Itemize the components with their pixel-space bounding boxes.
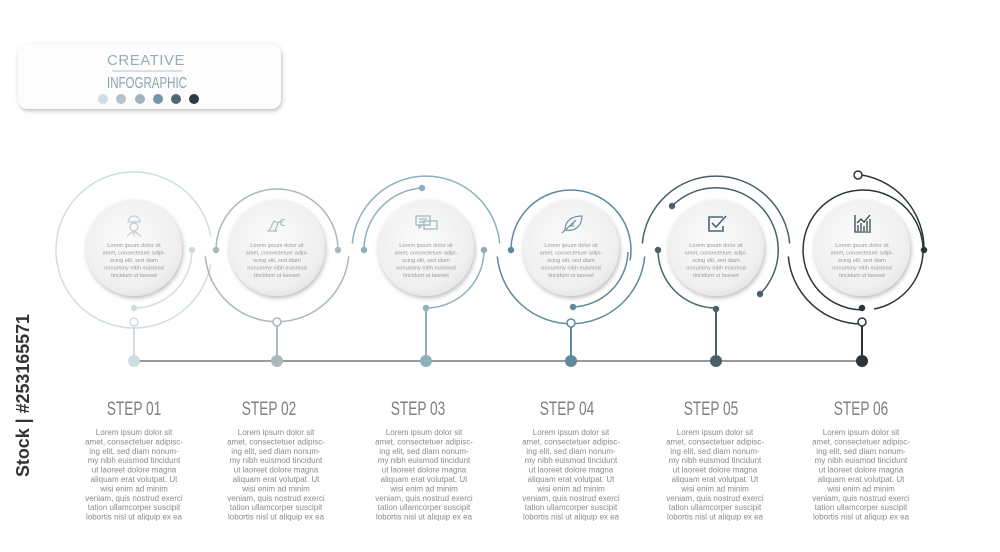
- step 5 description: [666, 428, 764, 522]
- circle 5: amet, consectetuer adipi-: [685, 250, 748, 256]
- icon: bar chart: [855, 215, 871, 232]
- circle 1: Lorem ipsum dolor sit: [107, 243, 161, 249]
- step 5 description: aliquam erat volutpat. Ut: [672, 475, 759, 484]
- step 2 rings: [205, 189, 349, 361]
- step 5 description: lobortis nisl ut aliquip ex ea: [667, 513, 764, 522]
- step 2 description: wisi enim ad minim: [241, 484, 310, 493]
- step 1 description: aliquam erat volutpat. Ut: [91, 475, 178, 484]
- step 2 description: [227, 428, 325, 522]
- step 3 description: Lorem ipsum dolor sit: [386, 428, 463, 437]
- step 5 rings: [642, 176, 790, 361]
- step 6 description: wisi enim ad minim: [826, 484, 895, 493]
- circle 2: Lorem ipsum dolor sit: [250, 243, 304, 249]
- step 5 description: ut laoreet dolore magna: [673, 466, 758, 475]
- circle 4: tincidunt ut laoreet: [548, 273, 594, 279]
- circle 5: tincidunt ut laoreet: [693, 273, 739, 279]
- step 3 description: wisi enim ad minim: [389, 484, 458, 493]
- circle 6: Lorem ipsum dolor sit: [835, 243, 889, 249]
- step 6 description: ing elit, sed diam nonum-: [816, 447, 906, 456]
- step 1 description: amet, consectetuer adipisc-: [85, 437, 183, 446]
- step 3 description: lobortis nisl ut aliquip ex ea: [376, 513, 473, 522]
- step 6 description: tation ullamcorper suscipit: [815, 503, 908, 512]
- step 1 description: lobortis nisl ut aliquip ex ea: [86, 513, 183, 522]
- icon: leaf: [562, 216, 582, 233]
- step 6 description: aliquam erat volutpat. Ut: [818, 475, 905, 484]
- step 4 description: ing elit, sed diam nonum-: [526, 447, 616, 456]
- step 3 description: amet, consectetuer adipisc-: [375, 437, 473, 446]
- step headings: STEP 03: [391, 398, 445, 420]
- step headings: STEP 01: [107, 398, 161, 420]
- step 6 description: veniam, quis nostrud exerci: [812, 494, 910, 503]
- step 1 rings: [56, 172, 211, 361]
- circle 2: [229, 200, 325, 296]
- step 3 description: ing elit, sed diam nonum-: [379, 447, 469, 456]
- step 1 description: ut laoreet dolore magna: [92, 466, 177, 475]
- circle 1: nonummy nibh euismod: [104, 266, 164, 272]
- circle 6: scing elit, sed diam: [838, 258, 886, 264]
- circle 4: amet, consectetuer adipi-: [540, 250, 603, 256]
- step 4 description: lobortis nisl ut aliquip ex ea: [523, 513, 620, 522]
- circle 6: amet, consectetuer adipi-: [831, 250, 894, 256]
- step headings: STEP 04: [540, 398, 594, 420]
- side stock label: Stock | #253165571: [13, 314, 33, 477]
- step 2 description: ut laoreet dolore magna: [234, 466, 319, 475]
- step 5 description: wisi enim ad minim: [680, 484, 749, 493]
- step 1 description: veniam, quis nostrud exerci: [85, 494, 183, 503]
- circle 5: scing elit, sed diam: [692, 258, 740, 264]
- step 5 description: ing elit, sed diam nonum-: [670, 447, 760, 456]
- colour dots: [98, 94, 199, 104]
- step 4 description: aliquam erat volutpat. Ut: [528, 475, 615, 484]
- step 1 description: wisi enim ad minim: [99, 484, 168, 493]
- circle 3: scing elit, sed diam: [402, 258, 450, 264]
- circle 3: amet, consectetuer adipi-: [395, 250, 458, 256]
- circle 6: nonummy nibh euismod: [832, 266, 892, 272]
- circle 2: nonummy nibh euismod: [247, 266, 307, 272]
- circle 5: [668, 200, 764, 296]
- title: INFOGRAPHIC: INFOGRAPHIC: [107, 73, 187, 91]
- step 1 description: Lorem ipsum dolor sit: [96, 428, 173, 437]
- step 3 description: my nibh euismod tincidunt: [378, 456, 471, 465]
- circle 5: Lorem ipsum dolor sit: [689, 243, 743, 249]
- step 2 description: veniam, quis nostrud exerci: [227, 494, 325, 503]
- circle 6: tincidunt ut laoreet: [839, 273, 885, 279]
- step 5 description: veniam, quis nostrud exerci: [666, 494, 764, 503]
- step 2 description: lobortis nisl ut aliquip ex ea: [228, 513, 325, 522]
- step 3 description: tation ullamcorper suscipit: [378, 503, 471, 512]
- icon: worker: [127, 216, 141, 237]
- step 2 description: my nibh euismod tincidunt: [230, 456, 323, 465]
- step 4 description: [522, 428, 620, 522]
- step 3 description: [375, 428, 473, 522]
- circle 6: [814, 200, 910, 296]
- step 3 description: veniam, quis nostrud exerci: [375, 494, 473, 503]
- step 3 rings: [352, 176, 500, 361]
- icon: chat: [416, 216, 437, 229]
- circle 1: scing elit, sed diam: [110, 258, 158, 264]
- circle 3: nonummy nibh euismod: [396, 266, 456, 272]
- step 5 description: my nibh euismod tincidunt: [669, 456, 762, 465]
- step 1 description: tation ullamcorper suscipit: [88, 503, 181, 512]
- circle 2: tincidunt ut laoreet: [254, 273, 300, 279]
- step 3 description: aliquam erat volutpat. Ut: [381, 475, 468, 484]
- step headings: STEP 06: [834, 398, 888, 420]
- timeline: [128, 355, 868, 367]
- step 2 description: aliquam erat volutpat. Ut: [233, 475, 320, 484]
- step 4 description: my nibh euismod tincidunt: [525, 456, 618, 465]
- circle 3: [378, 200, 474, 296]
- icon: checkbox: [709, 216, 726, 231]
- circle 4: nonummy nibh euismod: [541, 266, 601, 272]
- step 4 rings: [497, 190, 645, 361]
- step headings: STEP 02: [242, 398, 296, 420]
- step 2 description: tation ullamcorper suscipit: [230, 503, 323, 512]
- step 4 description: Lorem ipsum dolor sit: [533, 428, 610, 437]
- step 5 description: tation ullamcorper suscipit: [669, 503, 762, 512]
- circle 4: scing elit, sed diam: [547, 258, 595, 264]
- step 2 description: ing elit, sed diam nonum-: [231, 447, 321, 456]
- circle 2: amet, consectetuer adipi-: [246, 250, 309, 256]
- circle 5: nonummy nibh euismod: [686, 266, 746, 272]
- step headings: [107, 398, 888, 420]
- step 1 description: ing elit, sed diam nonum-: [89, 447, 179, 456]
- header card: [18, 44, 281, 109]
- step 4 description: amet, consectetuer adipisc-: [522, 437, 620, 446]
- circle 2: scing elit, sed diam: [253, 258, 301, 264]
- step 6 rings: [788, 171, 926, 361]
- title: CREATIVE: CREATIVE: [107, 52, 185, 69]
- step 4 description: veniam, quis nostrud exerci: [522, 494, 620, 503]
- step 6 description: amet, consectetuer adipisc-: [812, 437, 910, 446]
- circle 1: amet, consectetuer adipi-: [103, 250, 166, 256]
- step 6 description: [812, 428, 910, 522]
- step 4 description: ut laoreet dolore magna: [529, 466, 614, 475]
- step headings: STEP 05: [684, 398, 738, 420]
- step 2 description: amet, consectetuer adipisc-: [227, 437, 325, 446]
- step 6 description: ut laoreet dolore magna: [819, 466, 904, 475]
- circle 4: [523, 200, 619, 296]
- circle 4: Lorem ipsum dolor sit: [544, 243, 598, 249]
- step 4 description: wisi enim ad minim: [536, 484, 605, 493]
- step 6 description: Lorem ipsum dolor sit: [823, 428, 900, 437]
- step 1 description: [85, 428, 183, 522]
- step 6 description: lobortis nisl ut aliquip ex ea: [813, 513, 910, 522]
- step 4 description: tation ullamcorper suscipit: [525, 503, 618, 512]
- step 3 description: ut laoreet dolore magna: [382, 466, 467, 475]
- step 5 description: amet, consectetuer adipisc-: [666, 437, 764, 446]
- circle 1: tincidunt ut laoreet: [111, 273, 157, 279]
- step 6 description: my nibh euismod tincidunt: [815, 456, 908, 465]
- circle 1: [86, 200, 182, 296]
- step 5 description: Lorem ipsum dolor sit: [677, 428, 754, 437]
- step 1 description: my nibh euismod tincidunt: [88, 456, 181, 465]
- step 2 description: Lorem ipsum dolor sit: [238, 428, 315, 437]
- icon: robot arm: [267, 220, 285, 231]
- circle 3: tincidunt ut laoreet: [403, 273, 449, 279]
- circle 3: Lorem ipsum dolor sit: [399, 243, 453, 249]
